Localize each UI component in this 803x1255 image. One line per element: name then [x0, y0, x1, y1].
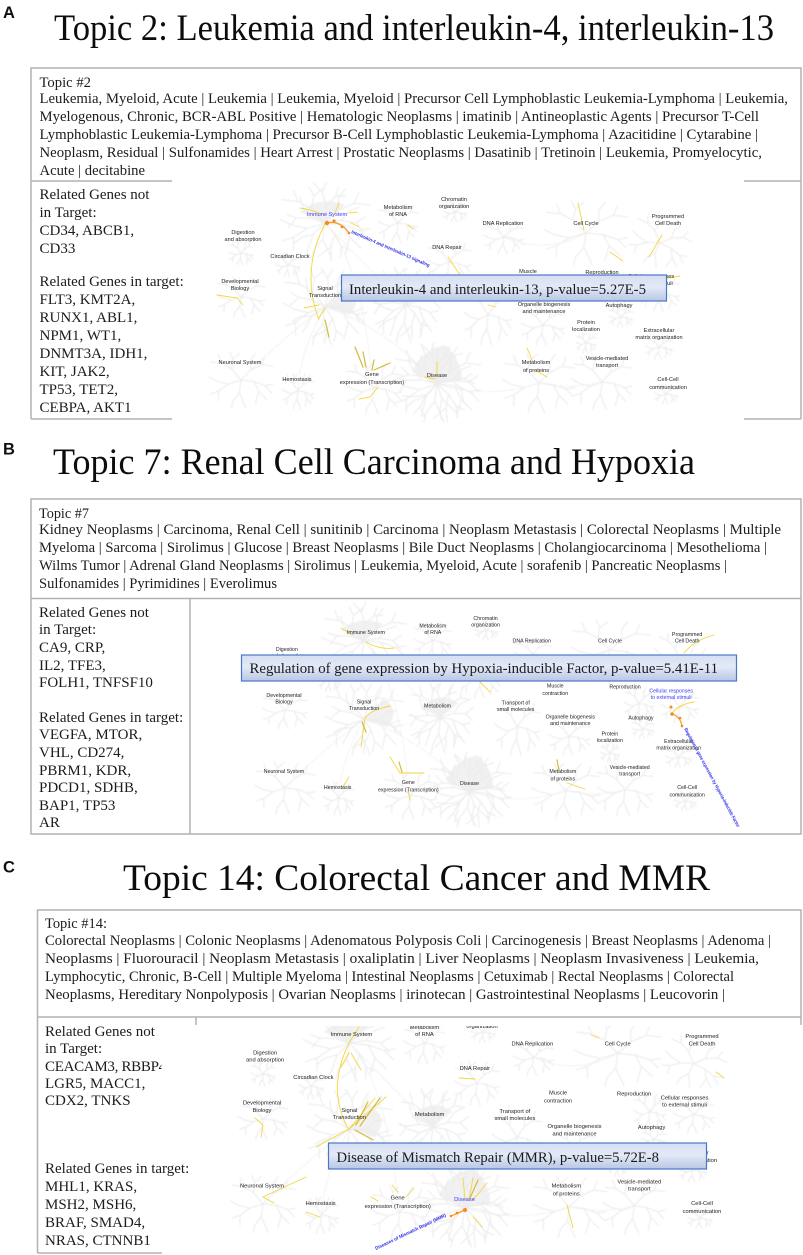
pathway labels: Developmental — [221, 279, 259, 285]
pathway labels: Autophagy — [606, 303, 633, 309]
pathway labels: Disease — [460, 781, 479, 787]
topic 14 term list: Colorectal Neoplasms | Colonic Neoplasms | Adenomatous Polyposis Coli | Carcinogenesis | Breast Neoplasms | Adenoma | — [45, 933, 771, 949]
pathway labels: and maintenance — [552, 1131, 597, 1137]
pathway labels: matrix organization — [668, 1158, 717, 1164]
pathway labels: organization — [466, 1024, 498, 1030]
pathway labels: organization — [439, 204, 469, 210]
enriched path: mismatch repair: Diseases of Mismatch Repair (MMR) — [374, 1213, 448, 1252]
topic 7 related genes: VEGFA, MTOR, — [39, 727, 142, 743]
pathway labels: expression (Transcription) — [340, 380, 404, 386]
pathway labels: Digestion — [276, 647, 298, 653]
pathway labels: Hemostasis — [282, 377, 312, 383]
pathway labels: Metabolism — [424, 703, 452, 709]
pathway labels: Metabolism — [419, 624, 447, 630]
pathway labels: contraction — [542, 691, 568, 697]
topic 7 related genes: in Target: — [39, 622, 96, 638]
pathway labels: matrix organization — [635, 335, 683, 341]
topic 14 term list: Neoplasms | Fluorouracil | Neoplasm Metastasis | oxaliplatin | Liver Neoplasms | Neoplasm Invasiveness | Leukemia, — [45, 951, 759, 967]
pathway labels: Programmed — [672, 632, 702, 638]
enriched path: interleukin signaling: Interleukin-4 and Interleukin-13 signaling — [350, 229, 431, 269]
callout: interleukin p-value — [342, 275, 666, 301]
heading: topic 14: Topic 14: Colorectal Cancer and MMR — [123, 858, 710, 899]
topic 2 term list: Myelogenous, Chronic, BCR-ABL Positive | Hematologic Neoplasms | imatinib | Antineoplastic Agents | Precursor T-Cell — [40, 109, 759, 125]
topic 2 term list — [40, 75, 788, 179]
pathway labels: Biology — [275, 700, 293, 706]
pathway labels: Immune System — [347, 630, 386, 636]
panel: topic 7 — [31, 499, 801, 840]
topic 2 related genes: RUNX1, ABL1, — [40, 310, 137, 326]
topic 7 related genes: BAP1, TP53 — [39, 798, 115, 814]
pathway labels: of proteins — [523, 368, 549, 374]
topic 14 related genes: CEACAM3, RBBP4, — [45, 1059, 169, 1075]
pathway labels: of proteins — [551, 776, 575, 782]
pathway labels: small molecules — [494, 1116, 535, 1122]
topic 14 term list: Lymphocytic, Chronic, B-Cell | Multiple Myeloma | Intestinal Neoplasms | Cetuximab | Rectal Neoplasms | Colorectal — [45, 969, 734, 985]
pathway labels: Metabolism — [410, 1025, 439, 1031]
pathway labels: transport — [596, 363, 618, 369]
pathway labels: DNA Replication — [483, 221, 523, 227]
pathway labels: Cell Cycle — [573, 221, 599, 227]
pathway labels: localization — [572, 327, 600, 333]
topic 14 related genes: LGR5, MACC1, — [45, 1076, 145, 1092]
pathway labels: Cellular responses — [661, 1096, 708, 1101]
pathway labels: Cell Cycle — [605, 1041, 631, 1047]
topic 14 related genes: CDX2, TNKS — [45, 1093, 131, 1109]
pathway labels: Metabolism — [549, 769, 577, 775]
pathway labels: communication — [649, 385, 687, 391]
topic 2 related genes: FLT3, KMT2A, — [40, 292, 135, 308]
enriched path: hypoxia-inducible factor: Regulation of gene expression by Hypoxia-inducible Factor — [682, 727, 741, 829]
topic 14 related genes: MHL1, KRAS, — [45, 1179, 137, 1195]
pathway labels: Transduction — [349, 706, 379, 712]
pathway labels: Immune System — [307, 212, 348, 218]
topic 7 related genes: VHL, CD274, — [39, 745, 124, 761]
pathway labels: Hemostasis — [306, 1201, 336, 1207]
pathway labels: Chromatin — [469, 1017, 495, 1023]
topic 7 term list: Topic #7 — [39, 506, 89, 522]
pathway labels — [219, 197, 687, 391]
pathway labels: Reproduction — [609, 685, 641, 691]
panel letter A: A — [3, 4, 15, 22]
topic 7 related genes: PDCD1, SDHB, — [39, 780, 138, 796]
topic 14 term list — [45, 916, 771, 1003]
pathway labels: communication — [669, 792, 705, 798]
pathway labels: and absorption — [246, 1058, 284, 1064]
pathway labels: Chromatin — [441, 197, 467, 203]
highlighted yellow pathways — [255, 1027, 724, 1228]
pathway labels: Gene — [365, 372, 379, 378]
pathway labels: Protein — [609, 1143, 627, 1149]
pathway map: topic 14 — [230, 1026, 727, 1250]
pathway labels: Gene — [402, 780, 415, 786]
pathway labels: small molecules — [466, 294, 506, 300]
pathway labels: Muscle — [519, 269, 537, 275]
pathway labels: Circadian Clock — [313, 670, 350, 676]
pathway labels: Transport of — [502, 700, 530, 706]
pathway labels: localization — [597, 738, 623, 744]
pathway labels: transport — [628, 1187, 651, 1193]
panel: topic 14 — [38, 910, 801, 1255]
topic 2 related genes — [40, 187, 184, 416]
topic 2 related genes: KIT, JAK2, — [40, 364, 110, 380]
pathway labels: of RNA — [415, 1032, 434, 1038]
topic 2 term list: Leukemia, Myeloid, Acute | Leukemia | Leukemia, Myeloid | Precursor Cell Lymphoblastic Leukemia-Lymphoma | Leukemia, — [40, 91, 788, 107]
topic 7 term list: Kidney Neoplasms | Carcinoma, Renal Cell | sunitinib | Carcinoma | Neoplasm Metastasis | Colorectal Neoplasms | Multiple — [39, 522, 781, 538]
enriched path: hypoxia-inducible factor — [670, 706, 741, 829]
pathway labels: Digestion — [231, 230, 255, 236]
pathway labels: Cellular responses — [628, 274, 674, 280]
topic 2 related genes: CD33 — [40, 241, 75, 257]
topic 7 related genes: PBRM1, KDR, — [39, 763, 131, 779]
pathway labels: localization — [603, 1150, 632, 1156]
pathway labels: Extracellular — [677, 1151, 709, 1157]
topic 7 related genes — [39, 605, 183, 831]
pathway labels: Vesicle-mediated — [586, 356, 628, 362]
topic 14 related genes: Related Genes in target: — [45, 1161, 189, 1177]
topic 7 term list: Wilms Tumor | Adrenal Gland Neoplasms | Sirolimus | Leukemia, Myeloid, Acute | sorafenib | Pancreatic Neoplasms | — [39, 558, 727, 574]
pathway labels: contraction — [544, 1099, 572, 1105]
pathway labels: Organelle biogenesis — [548, 1124, 602, 1130]
pathway labels: Neuronal System — [264, 769, 305, 775]
callout: interleukin p-value: Interleukin-4 and interleukin-13, p-value=5.27E-5 — [349, 281, 646, 298]
pathway labels: Metabolism — [552, 1183, 581, 1189]
pathway labels: Neuronal System — [219, 360, 262, 366]
pathway labels: expression (Transcription) — [365, 1204, 431, 1210]
pathway map: topic 2 — [209, 172, 696, 435]
pathway labels: Vesicle-mediated — [617, 1179, 661, 1185]
pathway labels: Chromatin — [473, 616, 498, 622]
topic 7 term list: Myeloma | Sarcoma | Sirolimus | Glucose | Breast Neoplasms | Bile Duct Neoplasms | Cholangiocarcinoma | Mesothelioma | — [39, 540, 767, 556]
topic 7 term list — [39, 506, 781, 592]
topic 14 related genes: in Target: — [45, 1041, 102, 1057]
pathway labels: expression (Transcription) — [378, 788, 439, 794]
pathway labels: Extracellular — [644, 328, 675, 334]
enriched path: interleukin signaling — [325, 219, 431, 269]
topic 2 related genes: DNMT3A, IDH1, — [40, 346, 147, 362]
topic 14 related genes: BRAF, SMAD4, — [45, 1215, 145, 1231]
topic 2 term list: Lymphoblastic Leukemia-Lymphoma | Precursor B-Cell Lymphoblastic Leukemia-Lymphoma | Azacitidine | Cytarabine | — [40, 127, 758, 143]
topic 7 related genes: IL2, TFE3, — [39, 658, 106, 674]
pathway labels: Cell-Cell — [691, 1201, 713, 1207]
pathway labels: Autophagy — [628, 715, 654, 721]
pathway labels — [264, 616, 705, 798]
pathway labels: Gene — [391, 1196, 405, 1202]
topic 2 related genes: TP53, TET2, — [40, 382, 118, 398]
pathway labels: transport — [619, 772, 641, 778]
topic 14 related genes: MSH2, MSH6, — [45, 1197, 136, 1213]
callout: mismatch repair p-value: Disease of Mismatch Repair (MMR), p-value=5.72E-8 — [336, 1149, 659, 1166]
topic 14 related genes: NRAS, CTNNB1 — [45, 1233, 151, 1249]
highlighted yellow pathways — [341, 628, 714, 800]
panel: topic 2 — [31, 68, 801, 435]
topic 7 related genes: FOLH1, TNFSF10 — [39, 675, 153, 691]
pathway labels: Cell Cycle — [598, 639, 622, 645]
pathway labels: Vesicle-mediated — [610, 765, 650, 771]
pathway labels: Muscle — [549, 1090, 567, 1096]
pathway labels: Autophagy — [638, 1125, 666, 1131]
pathway labels — [240, 1017, 721, 1215]
topic 7 term list: Sulfonamides | Pyrimidines | Everolimus — [39, 576, 277, 592]
pathway labels: and maintenance — [523, 309, 565, 315]
pathway labels: Circadian Clock — [293, 1075, 334, 1081]
panel letter C: C — [3, 858, 15, 876]
highlighted yellow pathways — [217, 203, 680, 399]
topic 2 term list: Topic #2 — [40, 75, 91, 91]
panel letter B: B — [3, 440, 15, 458]
pathway labels: Reproduction — [617, 1091, 651, 1097]
topic 2 term list: Neoplasm, Residual | Sulfonamides | Heart Arrest | Prostatic Neoplasms | Dasatinib | Tretinoin | Leukemia, Promyelocytic, — [40, 145, 762, 161]
pathway labels: Developmental — [266, 693, 302, 699]
pathway labels: DNA Replication — [513, 639, 551, 645]
topic 14 related genes: Related Genes not — [45, 1024, 156, 1040]
pathway labels: Metabolism — [415, 1112, 444, 1118]
topic 7 related genes: Related Genes in target: — [39, 710, 183, 726]
pathway labels: Immune System — [331, 1032, 372, 1038]
topic 7 related genes: AR — [39, 815, 60, 831]
pathway labels: DNA Repair — [460, 1066, 490, 1072]
pathway labels: Cell Death — [675, 639, 700, 645]
pathway labels: matrix organization — [656, 745, 701, 751]
pathway labels: Hemostasis — [324, 785, 352, 791]
pathway labels: of proteins — [553, 1192, 580, 1198]
pathway labels: Metabolism — [384, 205, 413, 211]
pathway labels: Reproduction — [585, 270, 619, 276]
pathway labels: Protein — [602, 731, 618, 737]
pathway labels: and absorption — [224, 237, 262, 243]
pathway labels: Disease — [454, 1197, 475, 1203]
pathway labels: Cell-Cell — [677, 785, 697, 791]
pathway labels: Cell-Cell — [657, 377, 679, 383]
pathway labels: Transport of — [500, 1109, 531, 1115]
pathway labels: Metabolism — [522, 360, 551, 366]
pathway labels: Digestion — [253, 1050, 277, 1056]
pathway labels: organization — [471, 623, 500, 629]
pathway labels: Biology — [253, 1108, 272, 1114]
callout: hypoxia p-value: Regulation of gene expression by Hypoxia-inducible Factor, p-value=5.41E-11 — [250, 660, 718, 677]
pathway labels: Developmental — [243, 1101, 281, 1107]
pathway labels: Signal — [357, 700, 371, 706]
pathway labels: contraction — [514, 277, 542, 283]
pathway labels: Protein — [577, 320, 595, 326]
pathway labels: communication — [683, 1209, 721, 1215]
heading: topic 7: Topic 7: Renal Cell Carcinoma and Hypoxia — [53, 442, 695, 483]
pathway labels: Extracellular — [664, 739, 693, 745]
topic 2 related genes: in Target: — [40, 205, 97, 221]
topic 2 related genes: CEBPA, AKT1 — [40, 400, 131, 416]
pathway labels: of RNA — [389, 212, 407, 218]
pathway labels: Metabolism — [389, 290, 418, 296]
topic 2 related genes: Related Genes in target: — [40, 274, 184, 290]
pathway labels: DNA Replication — [511, 1041, 553, 1047]
pathway labels: and absorption — [269, 654, 304, 660]
topic 14 related genes — [45, 1024, 189, 1249]
pathway labels: Transduction — [309, 293, 341, 299]
topic 14 term list: Neoplasms, Hereditary Nonpolyposis | Ovarian Neoplasms | irinotecan | Gastrointestinal Neoplasms | Leucovorin | — [45, 987, 725, 1003]
topic 2 related genes: Related Genes not — [40, 187, 150, 203]
pathway labels: Programmed — [652, 214, 684, 220]
pathway labels: to external stimuli — [629, 281, 673, 287]
pathway labels: Signal — [341, 1108, 357, 1114]
pathway labels: DNA Repair — [432, 245, 462, 251]
pathway labels: Transduction — [333, 1115, 366, 1121]
pathway labels: Cell Death — [689, 1041, 715, 1047]
callout: mismatch repair p-value — [328, 1143, 706, 1169]
topic 7 related genes: Related Genes not — [39, 605, 150, 621]
pathway map: topic 7 — [255, 593, 741, 840]
pathway labels: Biology — [231, 286, 249, 292]
topic 2 related genes: CD34, ABCB1, — [40, 223, 134, 239]
pathway labels: Neuronal System — [240, 1183, 284, 1189]
pathway labels: Circadian Clock — [270, 254, 310, 260]
pathway labels: Cell Death — [655, 221, 681, 227]
pathway labels: DNA Repair — [465, 661, 493, 667]
topic 14 term list: Topic #14: — [45, 916, 107, 932]
topic 2 term list: Acute | decitabine — [40, 163, 145, 179]
pathway labels: Signal — [317, 286, 333, 292]
topic 7 related genes: CA9, CRP, — [39, 640, 105, 656]
pathway labels: Transport of — [471, 287, 501, 293]
pathway labels: to external stimuli — [662, 1103, 707, 1109]
pathway labels: Cellular responses — [649, 688, 693, 694]
pathway labels: Disease — [427, 373, 447, 379]
pathway labels: small molecules — [497, 707, 535, 713]
pathway labels: and maintenance — [550, 721, 591, 727]
topic 2 related genes: NPM1, WT1, — [40, 328, 121, 344]
pathway labels: of RNA — [424, 630, 442, 636]
pathway labels: to external stimuli — [651, 695, 692, 701]
pathway labels: Organelle biogenesis — [546, 715, 595, 721]
pathway labels: Muscle — [547, 684, 564, 690]
pathway labels: Organelle biogenesis — [518, 302, 570, 308]
pathway labels: Programmed — [685, 1034, 719, 1040]
callout: hypoxia p-value — [242, 655, 736, 681]
